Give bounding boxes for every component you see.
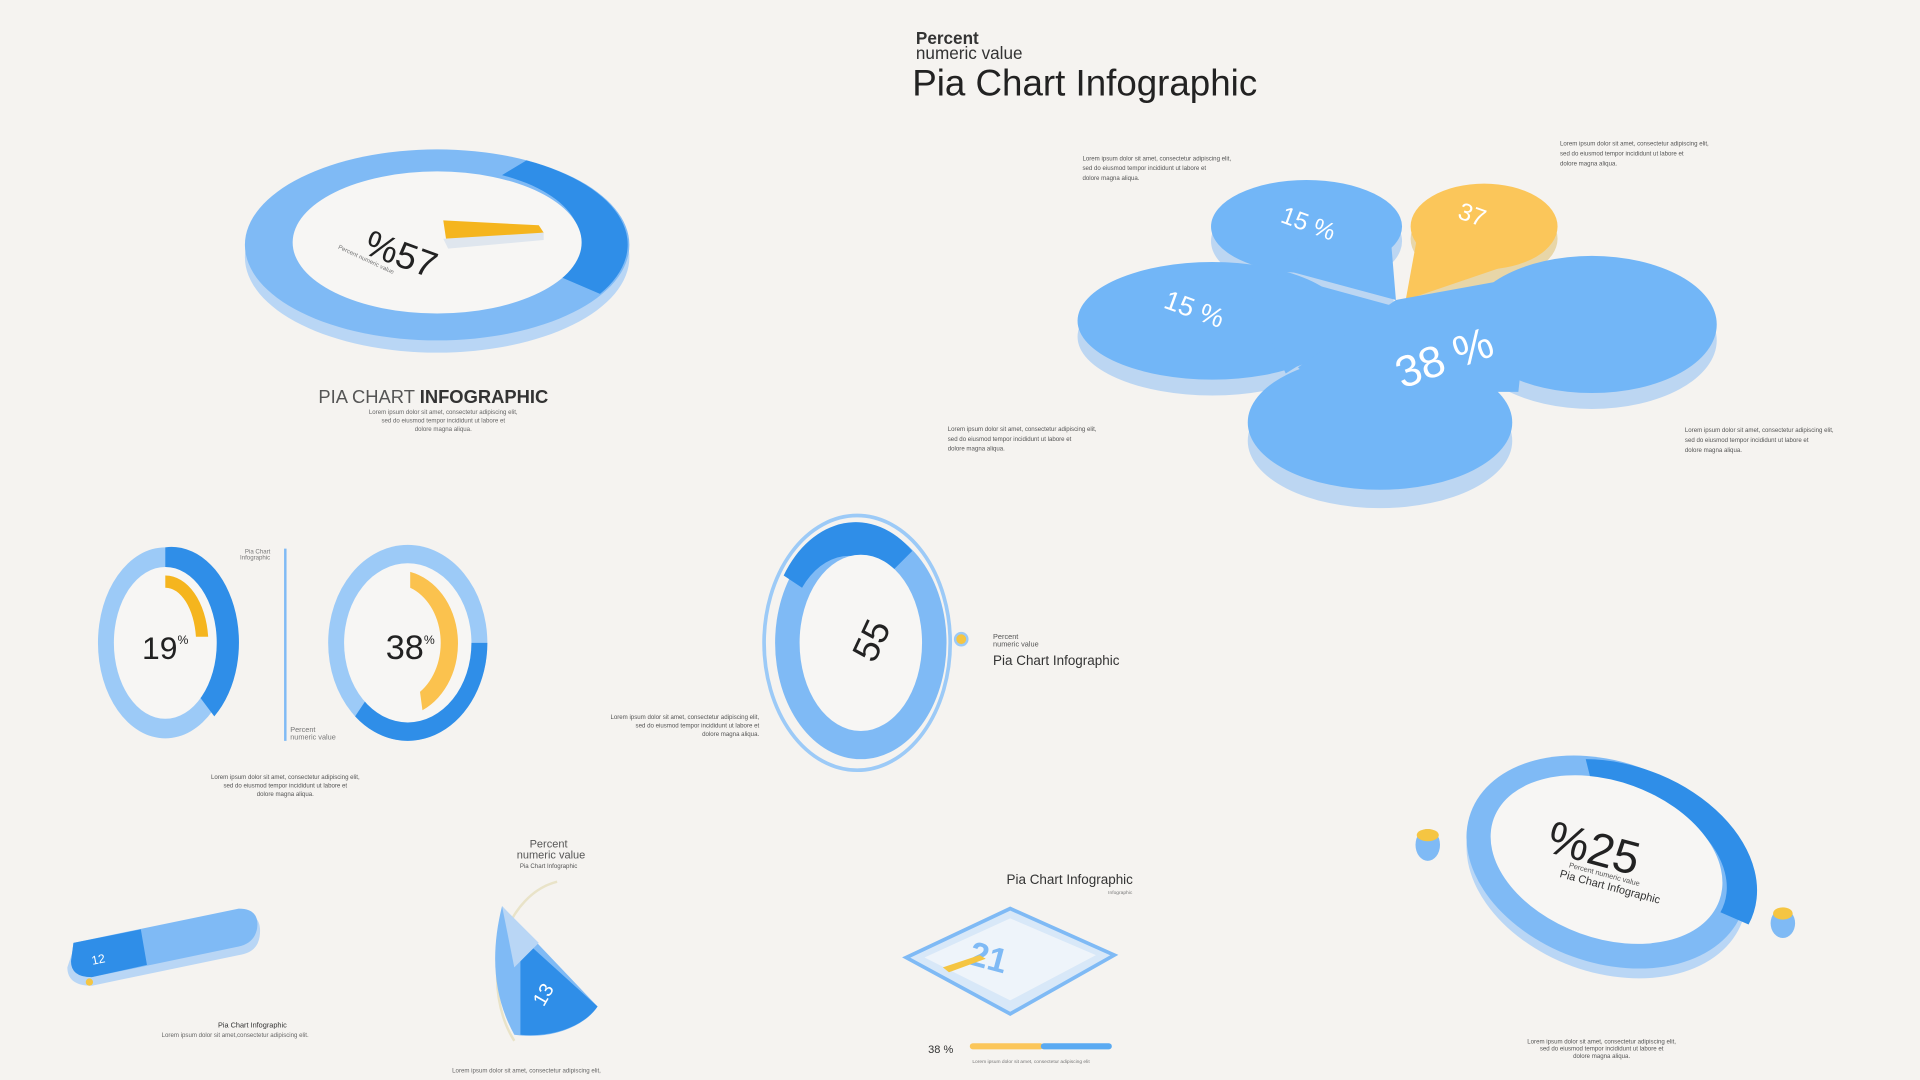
chart: flower petals: 38 % <box>1389 318 1500 398</box>
heading: pia chart infographic: sed do eiusmod tempor incididunt ut labore et <box>381 417 505 424</box>
chart: 25 ring: Pia Chart Infographic <box>1558 868 1662 907</box>
chart: 25 ring: dolore magna aliqua. <box>1573 1053 1630 1060</box>
heading: pia chart infographic: dolore magna aliqua. <box>415 426 472 433</box>
chart: 21 isometric square: Pia Chart Infographic <box>1007 872 1133 887</box>
chart: 13 slice: numeric value <box>517 849 585 861</box>
chart: 19 and 38 donuts: Lorem ipsum dolor sit amet, consectetur adipiscing elit, <box>211 774 360 781</box>
chart: 19 and 38 donuts: Infographic <box>240 555 270 562</box>
chart: 55 ring: dolore magna aliqua. <box>702 731 759 738</box>
chart: 25 ring: sed do eiusmod tempor incididunt ut labore et <box>1540 1046 1664 1053</box>
chart: 21 isometric square: Infographic <box>1108 890 1133 896</box>
chart: flower petals: 15 % <box>1160 285 1228 334</box>
chart: 21 isometric square <box>906 872 1133 1065</box>
text blocks: flower captions: Lorem ipsum dolor sit amet, consectetur adipiscing elit, <box>1685 427 1834 434</box>
chart: 19 and 38 donuts: % <box>177 633 188 647</box>
text blocks: flower captions: dolore magna aliqua. <box>1082 175 1140 182</box>
text blocks: flower captions: Lorem ipsum dolor sit amet, consectetur adipiscing elit, <box>948 426 1097 433</box>
chart: 19 and 38 donuts: Percent <box>290 725 315 734</box>
chart: 19 and 38 donuts <box>98 545 487 798</box>
heading: pia chart infographic: Lorem ipsum dolor sit amet, consectetur adipiscing elit, <box>369 409 518 416</box>
chart: 55 ring: 55 <box>844 613 899 668</box>
chart: 25 ring: Percent numeric value <box>1568 860 1641 888</box>
text blocks: flower captions <box>948 141 1834 454</box>
text blocks: flower captions: sed do eiusmod tempor incididunt ut labore et <box>948 436 1072 443</box>
chart: 13 slice <box>452 838 601 1075</box>
chart: 19 and 38 donuts: dolore magna aliqua. <box>257 791 314 798</box>
heading: pia chart infographic: PIA CHART INFOGRAPHIC <box>318 386 548 407</box>
chart: 19 and 38 donuts: Pia Chart <box>245 548 271 555</box>
title <box>912 28 1257 104</box>
panel: 57 percent donut: %57 <box>360 222 443 286</box>
chart: 13 slice: Percent <box>530 838 568 850</box>
chart: 12 bar pill: Pia Chart Infographic <box>218 1020 287 1029</box>
chart: 19 and 38 donuts: % <box>424 633 435 647</box>
text blocks: flower captions: dolore magna aliqua. <box>1685 447 1742 454</box>
chart: 55 ring: Lorem ipsum dolor sit amet, consectetur adipiscing elit, <box>610 714 759 721</box>
chart: 55 ring: Percent <box>993 632 1018 641</box>
panel: 57 percent donut <box>245 149 629 353</box>
chart: 55 ring: numeric value <box>993 640 1039 649</box>
chart: 21 isometric square: Lorem ipsum dolor sit amet, consectetur adipiscing elit <box>972 1059 1090 1065</box>
text blocks: flower captions: sed do eiusmod tempor incididunt ut labore et <box>1082 165 1206 172</box>
chart: 12 bar pill <box>67 909 309 1039</box>
chart: 25 ring <box>1416 718 1795 1060</box>
chart: 12 bar pill: Lorem ipsum dolor sit amet,consectetur adipiscing elit. <box>162 1032 309 1039</box>
text blocks: flower captions: dolore magna aliqua. <box>1560 160 1617 167</box>
title: numeric value <box>916 43 1023 63</box>
heading: pia chart infographic <box>318 386 548 433</box>
chart: 12 bar pill: 12 <box>90 951 107 968</box>
chart: flower petals: 15 % <box>1277 202 1339 247</box>
chart: 19 and 38 donuts: sed do eiusmod tempor incididunt ut labore et <box>223 782 347 789</box>
chart: 13 slice: Lorem ipsum dolor sit amet, consectetur adipiscing elit, <box>452 1068 601 1075</box>
chart: 21 isometric square: 21 <box>965 935 1012 981</box>
chart: 13 slice: 13 <box>529 980 559 1010</box>
chart: 55 ring: sed do eiusmod tempor incididunt ut labore et <box>636 722 759 729</box>
panel: 57 percent donut: Percent numeric value <box>337 244 395 276</box>
title: Percent <box>916 28 979 48</box>
chart: 19 and 38 donuts: numeric value <box>290 733 336 742</box>
text blocks: flower captions: Lorem ipsum dolor sit amet, consectetur adipiscing elit, <box>1560 141 1709 148</box>
text blocks: flower captions: sed do eiusmod tempor incididunt ut labore et <box>1685 437 1809 444</box>
chart: flower petals <box>1078 180 1717 508</box>
chart: 19 and 38 donuts: 19 <box>142 630 177 666</box>
chart: 55 ring <box>610 516 1120 770</box>
text blocks: flower captions: sed do eiusmod tempor incididunt ut labore et <box>1560 151 1684 158</box>
chart: flower petals: 37 <box>1454 198 1489 233</box>
chart: 19 and 38 donuts: 38 <box>386 629 424 667</box>
chart: 55 ring: Pia Chart Infographic <box>993 653 1120 668</box>
title: Pia Chart Infographic <box>912 63 1257 104</box>
text blocks: flower captions: Lorem ipsum dolor sit amet, consectetur adipiscing elit, <box>1082 155 1231 162</box>
chart: 25 ring: Lorem ipsum dolor sit amet, consectetur adipiscing elit, <box>1527 1038 1676 1045</box>
text blocks: flower captions: dolore magna aliqua. <box>948 446 1005 453</box>
chart: 21 isometric square: 38 % <box>928 1044 953 1056</box>
chart: 13 slice: Pia Chart Infographic <box>520 863 577 870</box>
chart: 25 ring: %25 <box>1542 811 1646 885</box>
